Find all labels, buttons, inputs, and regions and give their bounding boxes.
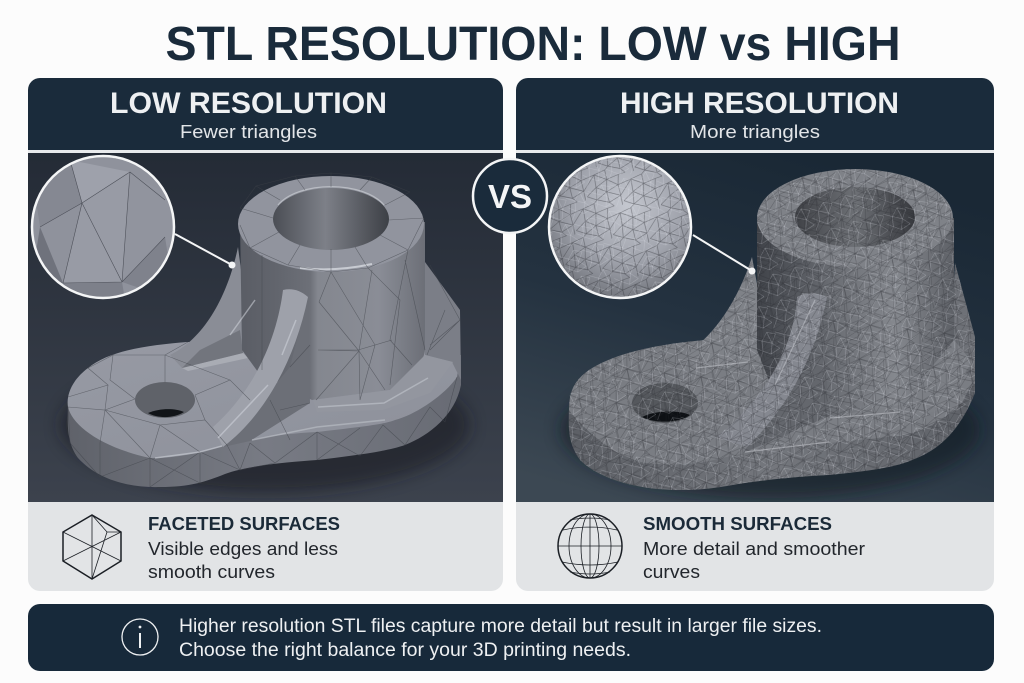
callout leader: low resolution <box>175 234 236 268</box>
front rib band <box>213 289 308 447</box>
description: faceted surfaces: Visible edges and less <box>148 538 338 559</box>
description: smooth surfaces <box>643 538 865 582</box>
icon: faceted polyhedron <box>63 515 121 579</box>
callout leader: high resolution <box>693 235 756 274</box>
low resolution image background <box>28 153 503 502</box>
panel: low resolution <box>28 78 503 591</box>
low resolution header: Fewer triangles <box>180 121 317 142</box>
3D model: high resolution bracket <box>560 160 993 512</box>
front rib right face <box>223 297 310 447</box>
front rib band <box>717 293 827 447</box>
top ring <box>757 169 953 267</box>
high resolution header: More triangles <box>690 121 820 142</box>
right rib <box>950 263 975 385</box>
panel: high resolution <box>516 78 994 591</box>
icon: wireframe sphere <box>558 514 622 578</box>
description: smooth surfaces: More detail and smoother <box>643 538 865 559</box>
left rib <box>687 257 760 368</box>
flange <box>313 355 453 412</box>
footer text: Higher resolution STL files capture more detail but result in larger file sizes. <box>179 616 822 637</box>
left rib <box>170 247 245 368</box>
3D model: low resolution bracket <box>60 173 470 493</box>
VS badge: VS <box>488 178 532 215</box>
high resolution info card <box>516 502 994 591</box>
front rib right face <box>743 297 827 453</box>
mounting hole <box>135 382 195 418</box>
description: faceted surfaces <box>148 538 338 582</box>
low resolution info card <box>28 502 503 591</box>
icon: info <box>122 619 158 655</box>
title: STL RESOLUTION: LOW vs HIGH <box>166 18 900 71</box>
top ring <box>238 176 424 272</box>
right rib <box>425 262 461 380</box>
cylinder body <box>757 218 954 417</box>
description: faceted surfaces: smooth curves <box>148 561 275 582</box>
label: smooth surfaces: SMOOTH SURFACES <box>643 514 832 534</box>
label: faceted surfaces: FACETED SURFACES <box>148 514 340 534</box>
mesh highlights <box>155 300 296 458</box>
dense mesh texture <box>568 169 975 490</box>
cylinder body <box>240 222 425 400</box>
high resolution image background <box>516 153 994 502</box>
flange <box>828 340 972 428</box>
low-poly mesh lines <box>68 173 460 487</box>
mounting hole <box>632 383 698 423</box>
footer note <box>28 604 994 671</box>
footer text <box>179 616 822 661</box>
VS badge <box>473 159 547 233</box>
description: smooth surfaces: curves <box>643 561 700 582</box>
low resolution header <box>28 78 503 153</box>
low resolution header: LOW RESOLUTION <box>110 87 387 120</box>
high resolution header: HIGH RESOLUTION <box>620 87 899 120</box>
mesh highlights <box>696 300 900 452</box>
magnifier: smooth dense mesh detail <box>545 152 695 302</box>
footer text: Choose the right balance for your 3D printing needs. <box>179 640 631 661</box>
high resolution header <box>516 78 994 153</box>
magnifier: low-poly detail <box>30 156 175 300</box>
